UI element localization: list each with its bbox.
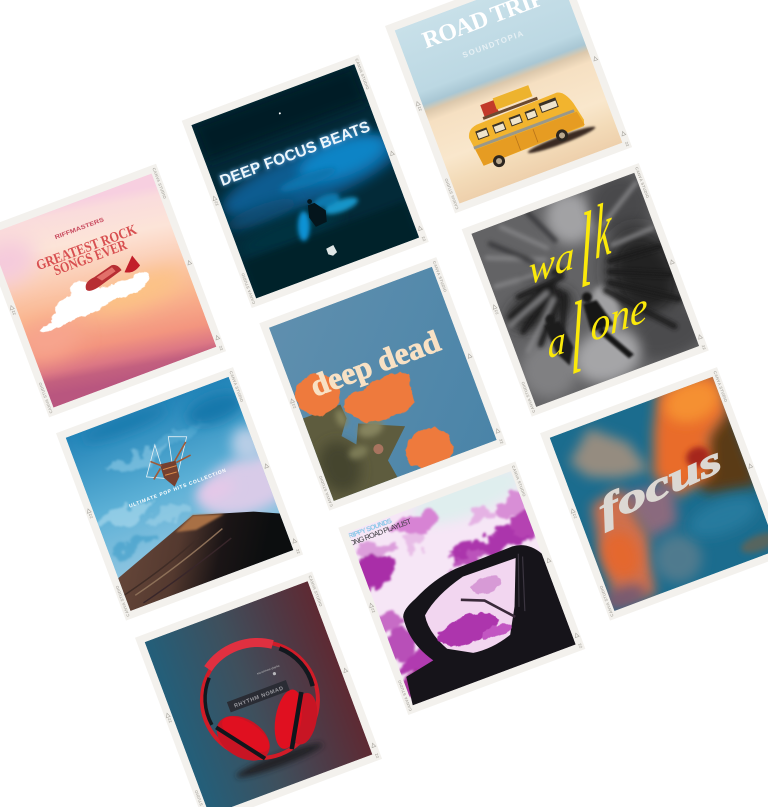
dune: [107, 486, 293, 611]
logo dot: [272, 672, 276, 676]
frame markings: [464, 166, 707, 415]
frame markings: [542, 370, 768, 619]
frame markings: [387, 0, 631, 212]
cover art: [145, 581, 372, 807]
small tagline: soundcheck playlist: [256, 663, 280, 676]
frame markings: [340, 465, 584, 713]
cover art: [472, 172, 699, 407]
frame markings: 22: [218, 345, 225, 352]
frame markings: 22: [374, 753, 381, 760]
alone lettering: one: [590, 281, 648, 352]
frame markings: CANVA STUDIO: [397, 679, 413, 712]
title: deep dead: [305, 323, 445, 403]
frame: [259, 257, 506, 511]
orange flowers: [294, 372, 454, 468]
frame: [338, 462, 585, 715]
cover art: [540, 369, 768, 616]
frame markings: [261, 260, 505, 509]
walking figure: [580, 291, 635, 360]
right ear cup: [271, 687, 321, 753]
card: Greatest Rock Songs Ever: [0, 164, 226, 424]
frame markings: CANVA STUDIO: [432, 260, 448, 293]
artist name: RHYTHM NOMAD: [233, 686, 284, 710]
cyan splash: [294, 191, 361, 244]
frame markings: 22: [295, 548, 302, 555]
frame: [0, 164, 226, 417]
card: Road Trip: [385, 0, 632, 213]
frame markings: [0, 167, 225, 416]
left ear cup: [209, 707, 278, 770]
frame markings: CANVA STUDIO: [240, 272, 256, 305]
bus shadow: [526, 124, 597, 156]
walk lettering: [530, 202, 612, 288]
title: focus: [594, 438, 726, 533]
cover art: [395, 0, 622, 204]
label: RIPPY SOUNDS: [348, 518, 393, 540]
frame markings: CANVA STUDIO: [634, 166, 650, 199]
frame markings: [184, 58, 427, 306]
frame: [462, 163, 709, 417]
frame: [385, 0, 632, 213]
mirror glass: [416, 557, 542, 665]
frame: [540, 367, 768, 621]
cover art: [329, 457, 584, 711]
frame markings: CANVA STUDIO: [712, 370, 729, 403]
frame: [135, 572, 382, 807]
label: RIFFMASTERS: [54, 217, 105, 241]
frame markings: CANVA STUDIO: [114, 585, 131, 617]
walk lettering: wa: [529, 231, 575, 294]
frame markings: 22: [577, 643, 584, 650]
alone lettering: l: [570, 281, 584, 398]
card: Deep Focus Beats: [182, 52, 437, 308]
frame markings: CANVA STUDIO: [354, 58, 370, 90]
frame markings: 22: [421, 236, 427, 243]
frame markings: [137, 575, 381, 807]
frame markings: 22: [213, 200, 220, 207]
cover art: [66, 376, 294, 611]
cactus: [303, 404, 405, 501]
falling figure: [145, 442, 199, 493]
car mirror: [373, 538, 576, 705]
artist: SOUNDTOPIA: [461, 29, 525, 60]
sky wisps: [78, 418, 241, 560]
card: Long Road Playlist: [329, 457, 587, 718]
frame markings: CANVA STUDIO: [307, 575, 324, 607]
frame markings: 22: [701, 344, 707, 351]
frame markings: 22: [493, 308, 500, 315]
alone lettering: a: [548, 317, 566, 368]
title: LONG ROAD PLAYLIST: [345, 516, 413, 549]
walk lettering: l: [579, 189, 593, 311]
frame markings: CANVA STUDIO: [318, 475, 334, 507]
red car: [86, 256, 140, 291]
walk lettering: k: [594, 186, 612, 277]
card: Rhythm Nomad: [135, 572, 382, 807]
title: DEEP FOCUS BEATS: [218, 118, 373, 190]
logo mark: [326, 245, 337, 256]
reflected clouds: [423, 572, 520, 657]
title line 2: SONGS EVER: [52, 237, 130, 279]
cover art: [0, 173, 216, 417]
artist plate: [227, 680, 290, 712]
magenta clouds: [335, 474, 579, 701]
triangle outlines: [136, 431, 201, 493]
crowd figures: [544, 313, 575, 366]
frame markings: 22: [416, 105, 423, 112]
frame markings: 22: [87, 512, 94, 519]
cloud: [40, 272, 150, 333]
frame: [56, 367, 303, 621]
frame markings: 22: [624, 141, 631, 148]
roof luggage: [478, 84, 538, 120]
frame markings: [58, 370, 302, 619]
frame markings: CANVA STUDIO: [598, 585, 615, 617]
frame markings: CANVA STUDIO: [511, 465, 527, 497]
card: Ultimate Pop Hits Collection: [56, 367, 303, 620]
motion streaks: [484, 180, 683, 352]
title glow: DEEP FOCUS BEATS: [218, 118, 373, 190]
arm: [461, 584, 515, 633]
rider silhouette: [307, 199, 327, 227]
frame markings: CANVA STUDIO: [443, 178, 460, 210]
shadow: [234, 739, 325, 782]
cover art: [191, 64, 420, 298]
frame markings: 22: [498, 438, 505, 445]
star: [279, 112, 281, 115]
frame markings: 22: [166, 717, 173, 724]
frame markings: CANVA STUDIO: [37, 382, 54, 414]
card: Walk Alone: [462, 160, 717, 417]
frame markings: 22: [370, 607, 376, 614]
frame markings: 22: [571, 512, 578, 519]
frame markings: CANVA STUDIO: [228, 370, 245, 403]
title: ULTIMATE POP HITS COLLECTION: [128, 468, 227, 510]
frame: [182, 55, 429, 308]
frame markings: CANVA STUDIO: [151, 167, 168, 200]
alone lettering: [549, 300, 647, 374]
frame markings: CANVA STUDIO: [520, 381, 536, 413]
frame markings: 22: [10, 309, 17, 316]
title: GREATEST ROCK: [34, 222, 140, 274]
cover art: [267, 267, 498, 506]
card: Deep Dead: [259, 257, 506, 511]
headband: [185, 625, 335, 775]
yellow bus: [468, 92, 585, 168]
frame markings: 22: [291, 402, 297, 409]
card: Focus: [540, 367, 768, 621]
